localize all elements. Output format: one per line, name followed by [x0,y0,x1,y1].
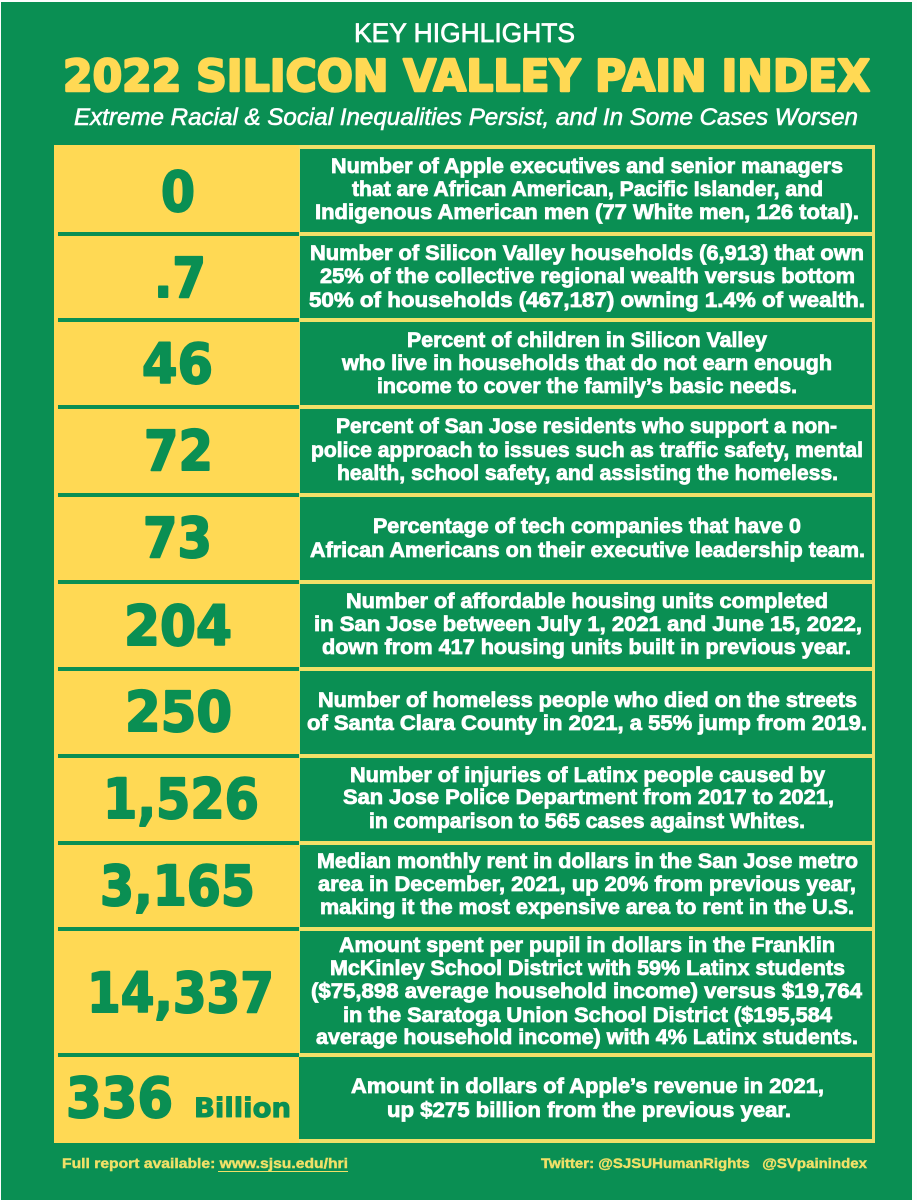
description: Number of injuries of Latinx people caused by [350,764,825,787]
row 1 [58,149,872,236]
value: 204: 204 [124,594,232,658]
description: in San Jose between July 1, 2021 and June 15, 2022, [314,613,862,636]
description: of Santa Clara County in 2021, a 55% jump from 2019. [307,712,867,735]
description [341,329,832,398]
subtitle: Extreme Racial & Social Inequalities Persist, and In Some Cases Worsen [74,104,858,131]
description [351,1075,824,1122]
value: 14,337: 14,337 [87,961,274,1025]
description: Indigenous American men (77 White men, 126 total). [315,201,859,224]
description: Percent of children in Silicon Valley [407,329,767,352]
description: income to cover the family’s basic needs. [377,375,797,398]
description [311,934,862,1049]
description [343,764,834,833]
description: 25% of the collective regional wealth versus bottom [320,265,855,288]
description [314,590,862,659]
description: health, school safety, and assisting the homeless. [337,462,838,485]
description: Number of Silicon Valley households (6,913) that own [310,242,864,265]
description: down from 417 housing units built in previous year. [322,636,851,659]
value: 3,165: 3,165 [100,854,255,918]
row 6 [58,584,872,671]
description [310,515,865,562]
description: in comparison to 565 cases against Whites. [369,810,805,833]
row 5 [58,497,872,584]
value: 73: 73 [143,506,212,570]
description: Amount in dollars of Apple’s revenue in 2021, [351,1075,824,1098]
description: Amount spent per pupil in dollars in the Franklin [339,934,835,957]
row 8 [58,758,872,845]
value: 336: 336 [66,1066,173,1130]
value: 1,526: 1,526 [103,767,259,831]
description [315,155,859,224]
description: police approach to issues such as traffic safety, mental [311,439,863,462]
description [309,242,865,312]
description: ($75,898 average household income) versus $19,764 [311,980,862,1003]
row 9 [58,845,872,931]
row 11 [66,1057,872,1139]
description: McKinley School District with 59% Latinx students [330,957,845,980]
description [307,689,867,735]
value: .7: .7 [154,246,206,310]
footer: twitter handles: Twitter: @SJSUHumanRights @SVpainindex [541,1155,867,1171]
row 7 [58,671,872,758]
footer: report link: Full report available: www.sjsu.edu/hri [62,1155,348,1171]
value: 0: 0 [161,160,195,224]
heading: key highlights: KEY HIGHLIGHTS [354,18,575,48]
description: 50% of households (467,187) owning 1.4% of wealth. [309,289,865,312]
row 3 [58,322,872,409]
description: who live in households that do not earn enough [341,352,832,375]
description: up $275 billion from the previous year. [387,1099,791,1122]
description [311,415,863,485]
table panel [54,145,875,1143]
description: making it the most expensive area to rent in the U.S. [320,896,854,919]
description: Number of Apple executives and senior managers [331,155,843,178]
description: Percent of San Jose residents who support a non- [336,415,837,438]
row 10 [58,931,872,1057]
row 4 [58,409,872,497]
table frame [54,145,875,1143]
description: Number of homeless people who died on the streets [318,689,857,712]
value: 250: 250 [125,680,232,744]
value: 46: 46 [142,332,213,396]
description: that are African American, Pacific Islander, and [352,178,823,201]
description: Percentage of tech companies that have 0 [373,515,801,538]
description: average household income) with 4% Latinx students. [316,1026,858,1049]
footer [62,1155,867,1172]
title: 2022 SILICON VALLEY PAIN INDEX [63,51,870,102]
description: Median monthly rent in dollars in the San Jose metro [317,850,858,873]
description: San Jose Police Department from 2017 to 2021, [343,786,834,809]
description: Number of affordable housing units completed [346,590,828,613]
unit: billion: Billion [194,1093,291,1124]
description: African Americans on their executive leadership team. [310,539,865,562]
row 2 [58,236,872,322]
number column [54,145,299,1143]
description: in the Saratoga Union School District ($195,584 [343,1004,832,1027]
value: 72: 72 [144,419,213,483]
description [317,850,858,919]
header [63,18,870,131]
description: area in December, 2021, up 20% from previous year, [318,873,856,896]
